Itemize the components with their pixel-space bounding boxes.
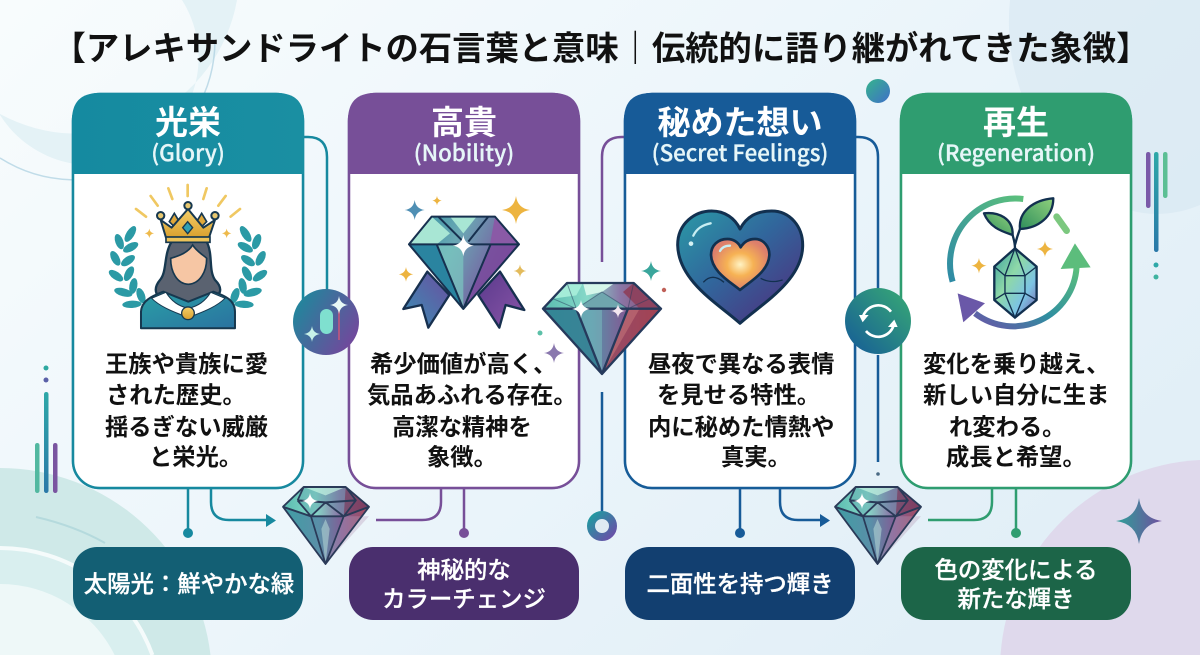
panel: nobility [348,93,580,488]
description: 象徴。 [427,438,497,472]
description: と栄光。 [149,438,242,472]
icon: queen with crown and laurel [107,185,269,328]
connector lines between cards [188,137,1016,530]
heading: 光栄 [155,96,221,144]
heading: 秘めた想い [658,96,822,144]
pill: color change: 神秘的な [417,551,511,585]
card header [624,93,856,174]
card frame [349,94,579,488]
decorative ring [591,515,613,537]
decorative bars: left [35,366,58,493]
icon: left connector medallion [293,289,359,355]
description: れ変わる。 [949,408,1065,442]
english heading: (Nobility) [414,136,514,168]
description: 真実。 [721,438,791,472]
card frame [625,94,855,488]
pill: color change [349,547,579,620]
description: 新しい自分に生ま [923,376,1109,410]
description: 高潔な精神を [392,408,532,442]
decorative bars: right [1146,152,1168,280]
english heading: (Glory) [151,136,225,168]
description: 気品あふれる存在。 [367,376,577,410]
description: 王族や貴族に愛 [105,345,268,379]
icon: sync medallion [845,288,911,354]
decorative dot: top [866,79,890,103]
card header [72,93,304,174]
panel: secret feelings [624,93,856,488]
panel: regeneration [900,93,1132,488]
icon: sprout crystal with cycle arrows [950,198,1091,326]
description: 変化を乗り越え、 [923,345,1109,379]
description [105,345,268,472]
pill: sunlight: 太陽光：鮮やかな緑 [84,565,294,599]
pill: new brilliance: 新たな輝き [958,580,1074,614]
title: 【アレキサンドライトの石言葉と意味｜伝統的に語り継がれてきた象徴】 [53,21,1149,70]
icon: central alexandrite gem [538,261,666,374]
icon: heart [678,211,803,323]
heading: 高貴 [431,96,497,144]
pill: new brilliance: 色の変化による [934,551,1098,585]
icon: small gem left [283,487,369,564]
pill: color change: カラーチェンジ [382,580,546,614]
pill: new brilliance [901,547,1131,620]
pill: duality [625,547,855,620]
description: 昼夜で異なる表情 [648,345,834,379]
icon: small gem right [835,487,921,564]
description: 成長と希望。 [946,438,1086,472]
description: 希少価値が高く、 [370,345,556,379]
description [648,345,834,472]
connector end dots and arrows [183,472,1021,538]
pill: sunlight [73,547,303,620]
description: を見せる特性。 [657,376,820,410]
decorative sparkle: bottom right [1116,498,1162,544]
english heading: (Secret Feelings) [652,136,828,168]
description [923,345,1109,472]
description [367,345,577,472]
description: された歴史。 [106,376,246,410]
panel: glory [72,93,304,488]
card header [900,93,1132,174]
english heading: (Regeneration) [937,136,1095,168]
card header [348,93,580,174]
pill: duality: 二面性を持つ輝き [646,565,834,599]
description: 揺るぎない威厳 [105,408,268,442]
icon: gem with ribbon [399,196,530,328]
heading: 再生 [983,96,1049,144]
card frame [73,94,303,488]
description: 内に秘めた情熱や [648,408,834,442]
card frame [901,94,1131,488]
